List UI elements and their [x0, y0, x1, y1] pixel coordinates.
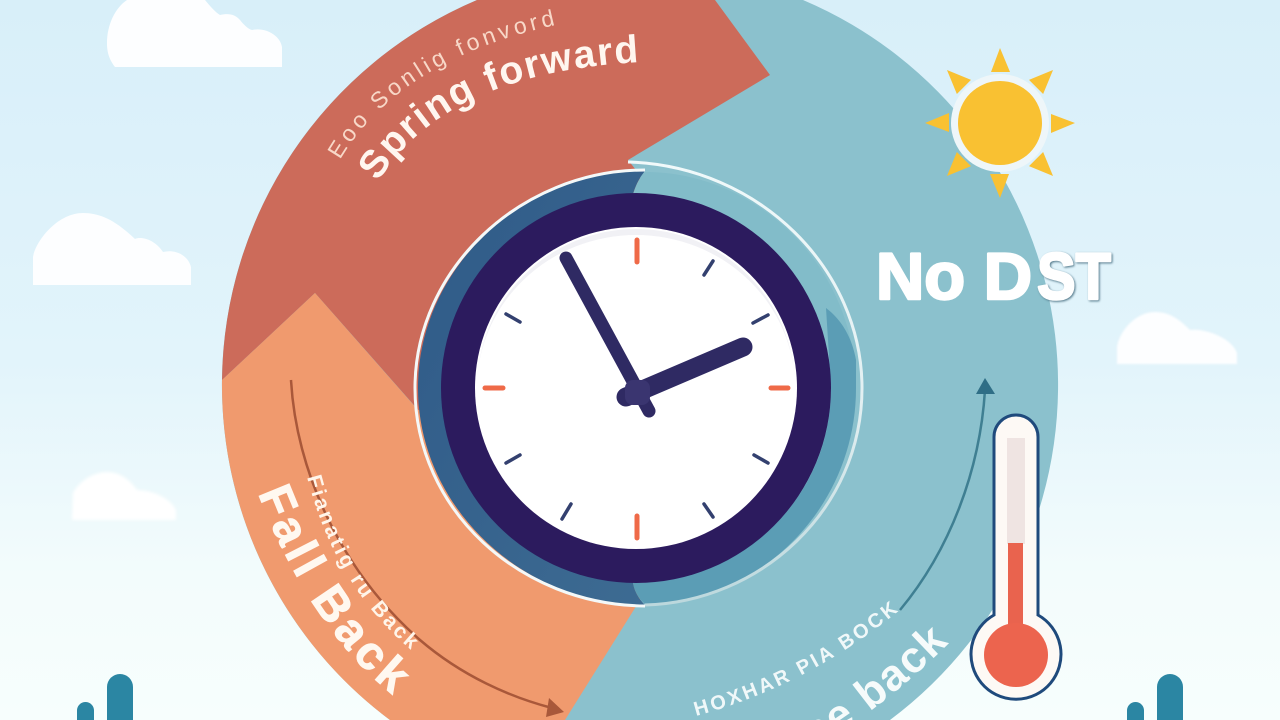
sun halo — [951, 74, 1049, 172]
clock face inner shade — [477, 229, 795, 388]
icon: sun — [925, 48, 1075, 198]
hour hand — [626, 347, 743, 397]
clock bezel right arc — [628, 162, 862, 605]
clock bezel left white arc — [415, 170, 645, 606]
clock bezel left blue — [418, 171, 645, 605]
clock bezel lower right shading — [633, 308, 856, 604]
heading: Spring forward: Spring forward — [360, 34, 636, 178]
cloud: right — [1117, 312, 1237, 364]
clock — [415, 162, 862, 606]
heading: No DST: No D — [876, 239, 1032, 313]
subheading: Spring forward small: Eoo Sonlig fonvord — [328, 9, 554, 158]
orange hour ticks — [485, 240, 788, 538]
clock hub — [625, 380, 650, 405]
clock face — [475, 227, 797, 549]
cloud: middle left — [33, 213, 191, 285]
arrow: time back curve — [900, 378, 995, 610]
cloud: lower left — [72, 472, 176, 520]
thermometer bulb — [984, 623, 1048, 687]
clock dark ring — [441, 193, 831, 583]
arrow: fall back curve — [291, 380, 564, 717]
panel: spring forward red segment — [222, 0, 770, 412]
cloud: top left — [107, 0, 282, 67]
bars: bottom left — [77, 674, 133, 720]
dark hour ticks — [506, 261, 768, 519]
clock bezel right teal — [633, 172, 856, 604]
thermometer mercury column — [1008, 543, 1023, 633]
heading: No DST: ST — [1037, 239, 1111, 313]
subheading: time back small: HOXHAR PIA BOCK — [694, 600, 898, 716]
heading: Fall Back: Fall Back — [258, 483, 410, 696]
thermometer outline — [971, 415, 1061, 699]
subheading: Fall Back small: Fianatig ru Back — [307, 474, 418, 650]
bars: bottom right — [1127, 674, 1183, 720]
panel: no DST teal segment — [222, 0, 1058, 720]
heading: No DST — [876, 239, 1111, 313]
minute hand — [566, 258, 649, 411]
thermometer empty column — [1007, 438, 1025, 544]
sun rays — [925, 48, 1075, 198]
panel: fall back orange segment — [222, 293, 640, 720]
icon: thermometer — [971, 415, 1061, 699]
sun disc — [958, 81, 1042, 165]
